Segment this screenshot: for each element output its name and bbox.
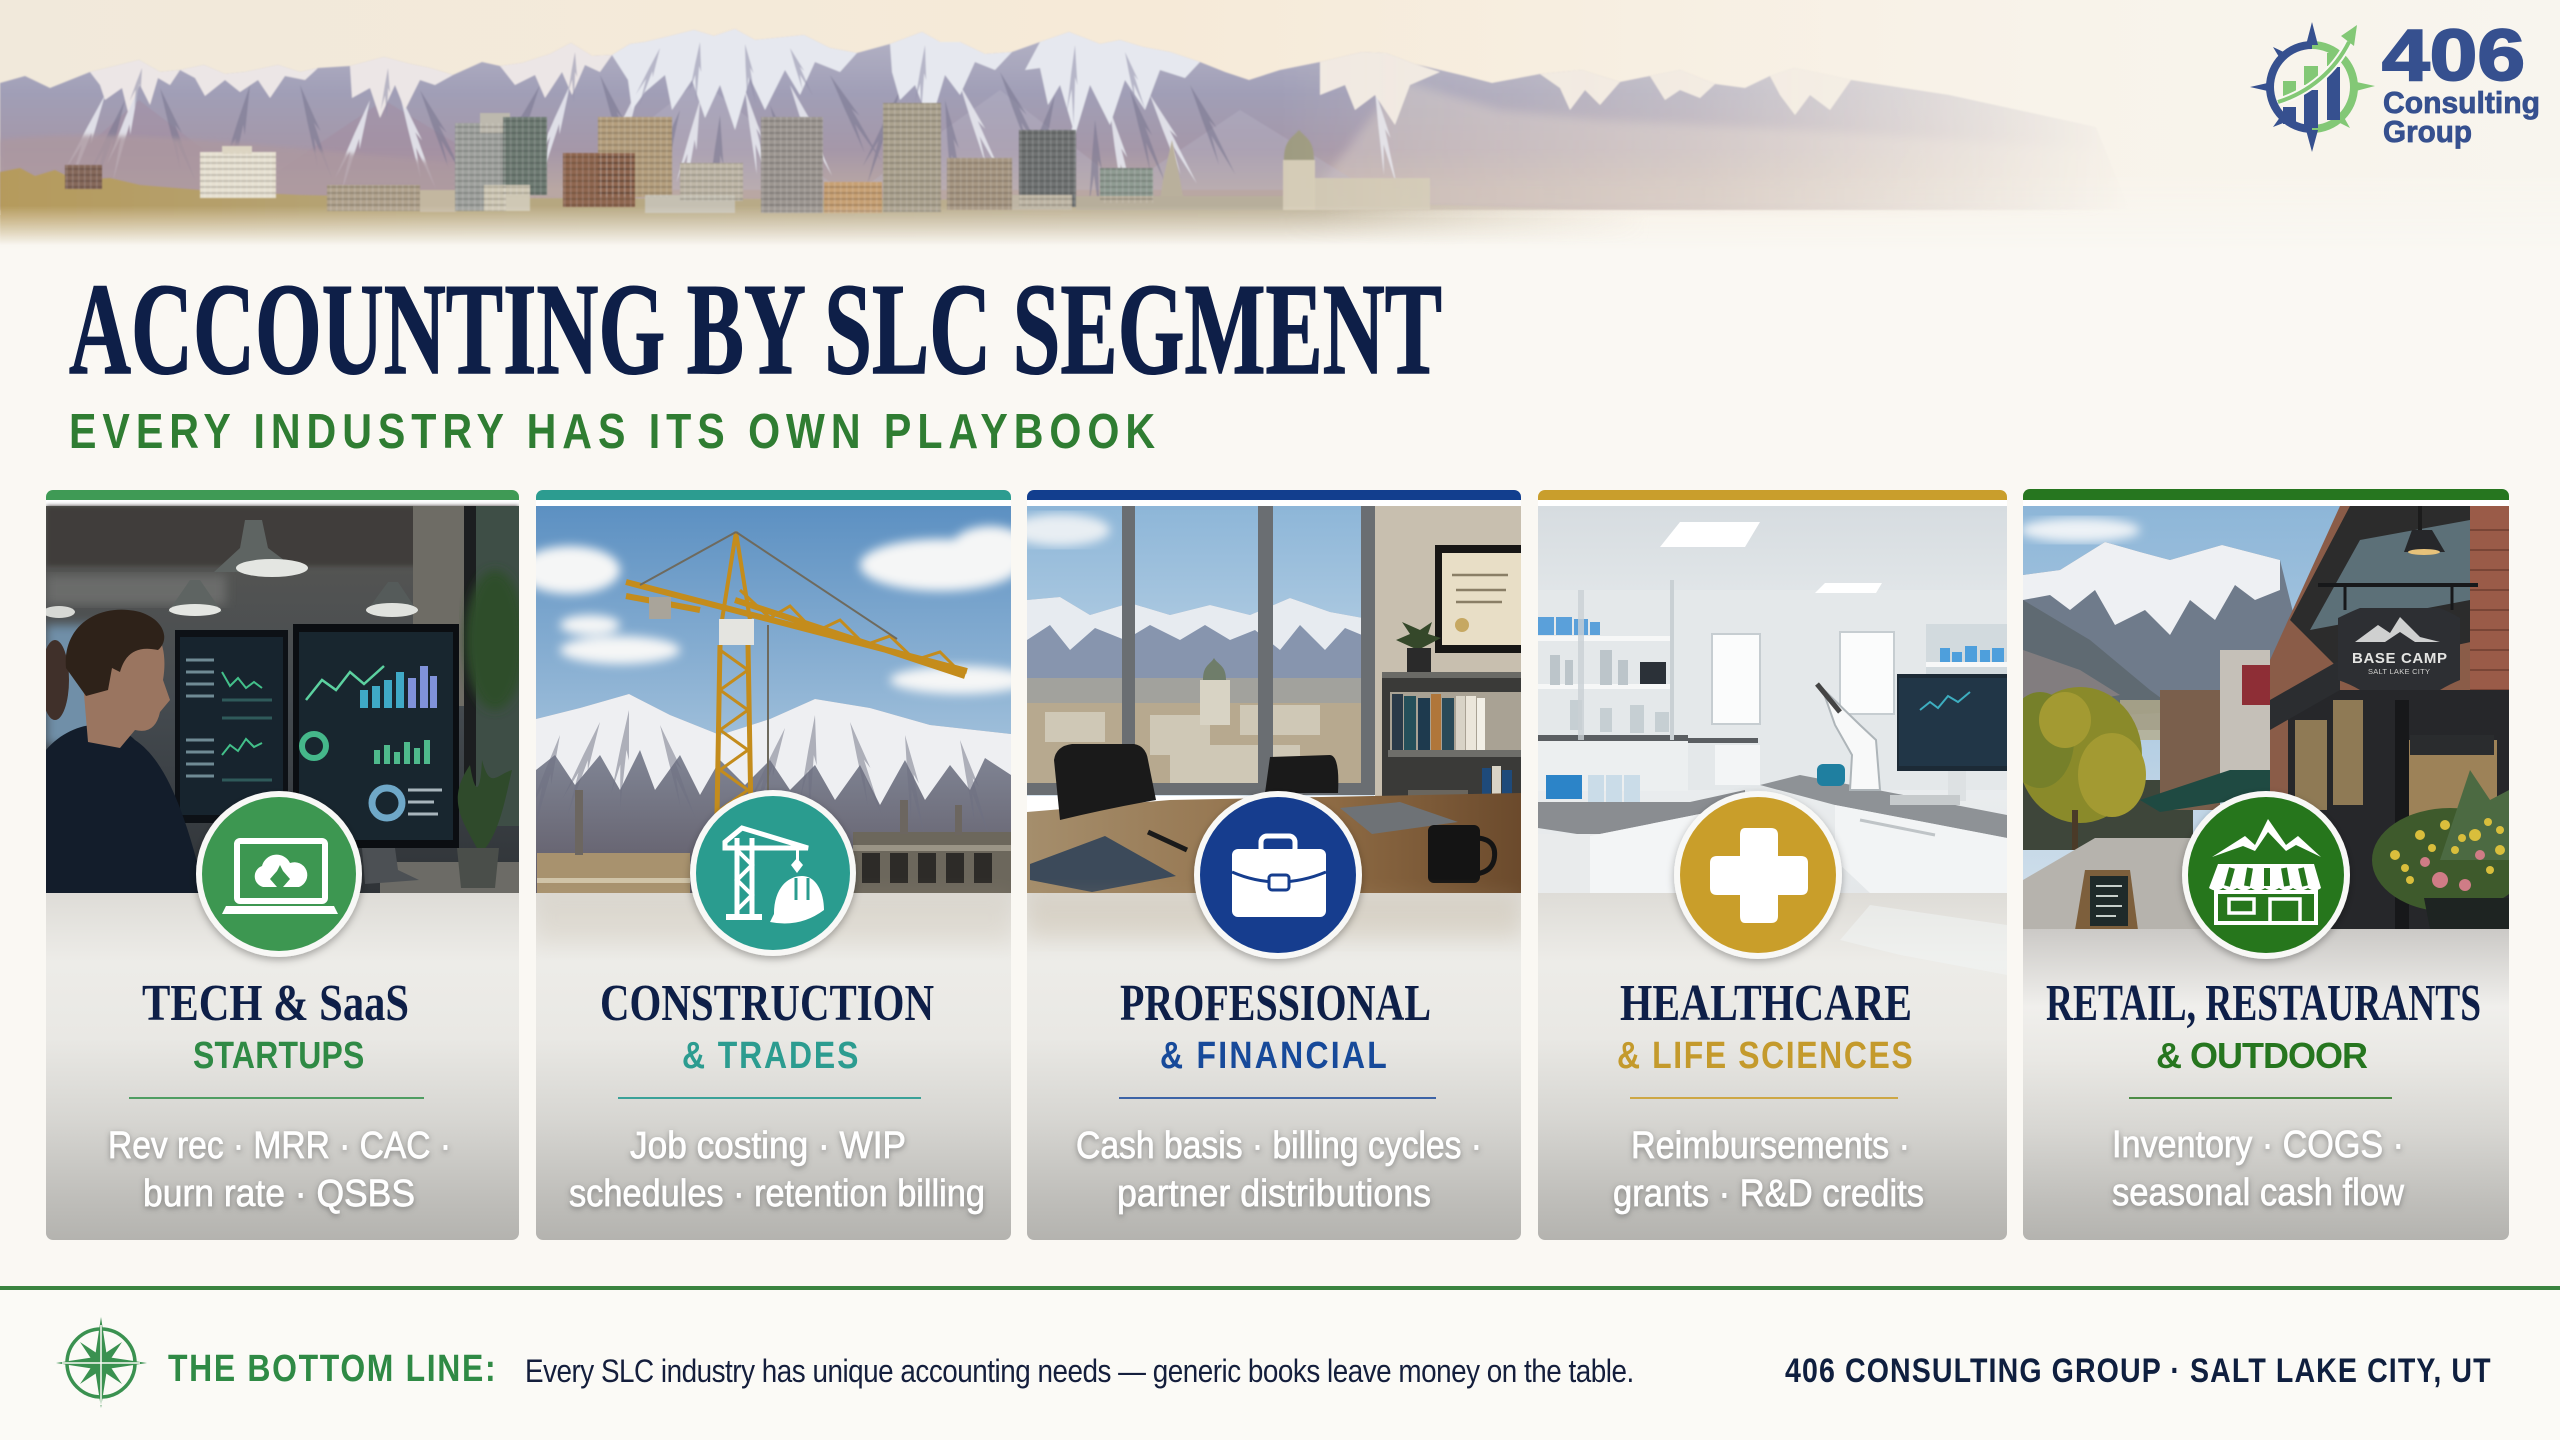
lab monitor <box>1890 674 2007 805</box>
card description: Rev rec · MRR · CAC · <box>108 1125 451 1167</box>
chalkboard sign <box>2075 870 2138 930</box>
potted plant <box>457 760 512 888</box>
card description: schedules · retention billing <box>569 1173 985 1215</box>
icon: laptop with cloud <box>196 791 362 957</box>
hanging lamp <box>2404 506 2445 555</box>
card description <box>569 1125 985 1215</box>
bottom line message: Every SLC industry has unique accounting needs — generic books leave money on the table. <box>525 1354 1634 1389</box>
photo: crane and mountains <box>520 506 1030 893</box>
panel: healthcare and life sciences <box>1538 490 2007 1240</box>
card subtitle: & FINANCIAL <box>1160 1034 1387 1077</box>
card description <box>2112 1124 2404 1214</box>
desk surface <box>380 862 519 893</box>
card subtitle: & TRADES <box>682 1034 858 1077</box>
card description <box>108 1125 451 1215</box>
card description: partner distributions <box>1117 1173 1431 1215</box>
office chairs <box>1054 744 1338 820</box>
desk <box>1027 793 1521 893</box>
panel: tech and saas <box>41 490 525 1240</box>
icon: compass rose <box>56 1317 147 1408</box>
card subtitle: & OUTDOOR <box>2156 1035 2368 1076</box>
card body <box>1027 893 1521 1240</box>
card description: Reimbursements · <box>1631 1125 1910 1167</box>
street trees <box>2006 687 2193 850</box>
low tree haze over ground <box>0 215 1 234</box>
blue containers on bench <box>1546 775 1640 805</box>
tower crane <box>626 532 967 815</box>
icon: medical cross <box>1674 791 1842 959</box>
card divider <box>1119 1097 1436 1099</box>
monitor stand <box>362 848 419 884</box>
laptop <box>1340 802 1458 834</box>
shop sign: Base Camp <box>2318 583 2478 690</box>
shop sign: Base Camp: SALT LAKE CITY <box>2368 667 2430 676</box>
card title: HEALTHCARE <box>1620 975 1912 1032</box>
logo: 406 Consulting Group <box>2250 16 2540 152</box>
footer band <box>0 1286 2560 1440</box>
card description: burn rate · QSBS <box>143 1173 415 1215</box>
card body <box>536 893 1011 1240</box>
subtitle: EVERY INDUSTRY HAS ITS OWN PLAYBOOK <box>69 404 1155 459</box>
logo wordmark Group: Group <box>2383 114 2472 149</box>
card description: grants · R&D credits <box>1613 1173 1924 1215</box>
state capitol dome <box>1283 130 1430 210</box>
logo wordmark 406: 406 <box>2382 16 2525 96</box>
photo: office overlooking capitol <box>1010 506 1525 893</box>
card description: seasonal cash flow <box>2112 1172 2404 1214</box>
flower planter <box>2372 770 2528 929</box>
panel: retail, restaurants and outdoor <box>2006 489 2528 1240</box>
panel: professional and financial <box>1010 490 1525 1240</box>
card title: TECH & SaaS <box>142 975 409 1032</box>
header: mountain and city skyline banner <box>0 0 2172 244</box>
card divider <box>129 1097 424 1099</box>
notebook and pen <box>1030 832 1187 892</box>
card description <box>1076 1125 1482 1215</box>
icon: crane and hard hat <box>690 790 856 956</box>
icon: storefront with mountains <box>2182 791 2350 959</box>
left bench <box>1538 790 1745 836</box>
card description: Inventory · COGS · <box>2112 1124 2404 1166</box>
card title: PROFESSIONAL <box>1120 975 1431 1032</box>
panel: construction and trades <box>520 490 1030 1240</box>
card body <box>2023 929 2509 1240</box>
left monitor <box>175 630 288 823</box>
city skyline buildings <box>65 103 1430 213</box>
window frames <box>1027 506 1375 795</box>
sidewalk <box>2023 838 2360 929</box>
shop sign: Base Camp: BASE CAMP <box>2352 650 2447 667</box>
potted plant <box>1396 622 1441 672</box>
card body <box>46 893 519 1240</box>
icon: briefcase <box>1194 791 1362 959</box>
bottom line label: THE BOTTOM LINE: <box>168 1347 496 1390</box>
right bench <box>1760 775 2007 838</box>
building frame under construction <box>537 790 1011 893</box>
card divider <box>1630 1097 1898 1099</box>
mountain range <box>0 29 2130 220</box>
microscope <box>1817 684 1880 790</box>
diploma on wall <box>1435 545 1525 653</box>
company and location: 406 CONSULTING GROUP · SALT LAKE CITY, UT <box>1785 1352 2491 1390</box>
card subtitle: STARTUPS <box>193 1034 364 1077</box>
logo compass mark <box>2250 22 2375 152</box>
card title: CONSTRUCTION <box>600 975 934 1032</box>
card divider <box>618 1097 921 1099</box>
card divider <box>2129 1097 2392 1099</box>
developer figure <box>41 610 205 893</box>
photo: mountain town storefront <box>2006 506 2528 930</box>
tree line and foreground <box>0 168 1650 245</box>
logo wordmark Consulting: Consulting <box>2383 85 2540 120</box>
brick storefront building <box>2270 506 2510 930</box>
card description <box>1613 1125 1924 1215</box>
left shelving with blue boxes <box>1538 580 1760 791</box>
right monitor <box>293 624 459 848</box>
card description: Cash basis · billing cycles · <box>1076 1125 1482 1167</box>
coffee mug <box>1428 825 1495 883</box>
distant buildings <box>2140 650 2270 812</box>
card description: Job costing · WIP <box>630 1125 906 1167</box>
title: ACCOUNTING BY SLC SEGMENT <box>69 257 1442 402</box>
card body <box>1538 893 2007 1240</box>
photo: developer at monitors <box>41 506 525 893</box>
bookshelf <box>1382 672 1521 818</box>
card subtitle: & LIFE SCIENCES <box>1617 1034 1913 1077</box>
photo: laboratory <box>1538 506 2007 893</box>
